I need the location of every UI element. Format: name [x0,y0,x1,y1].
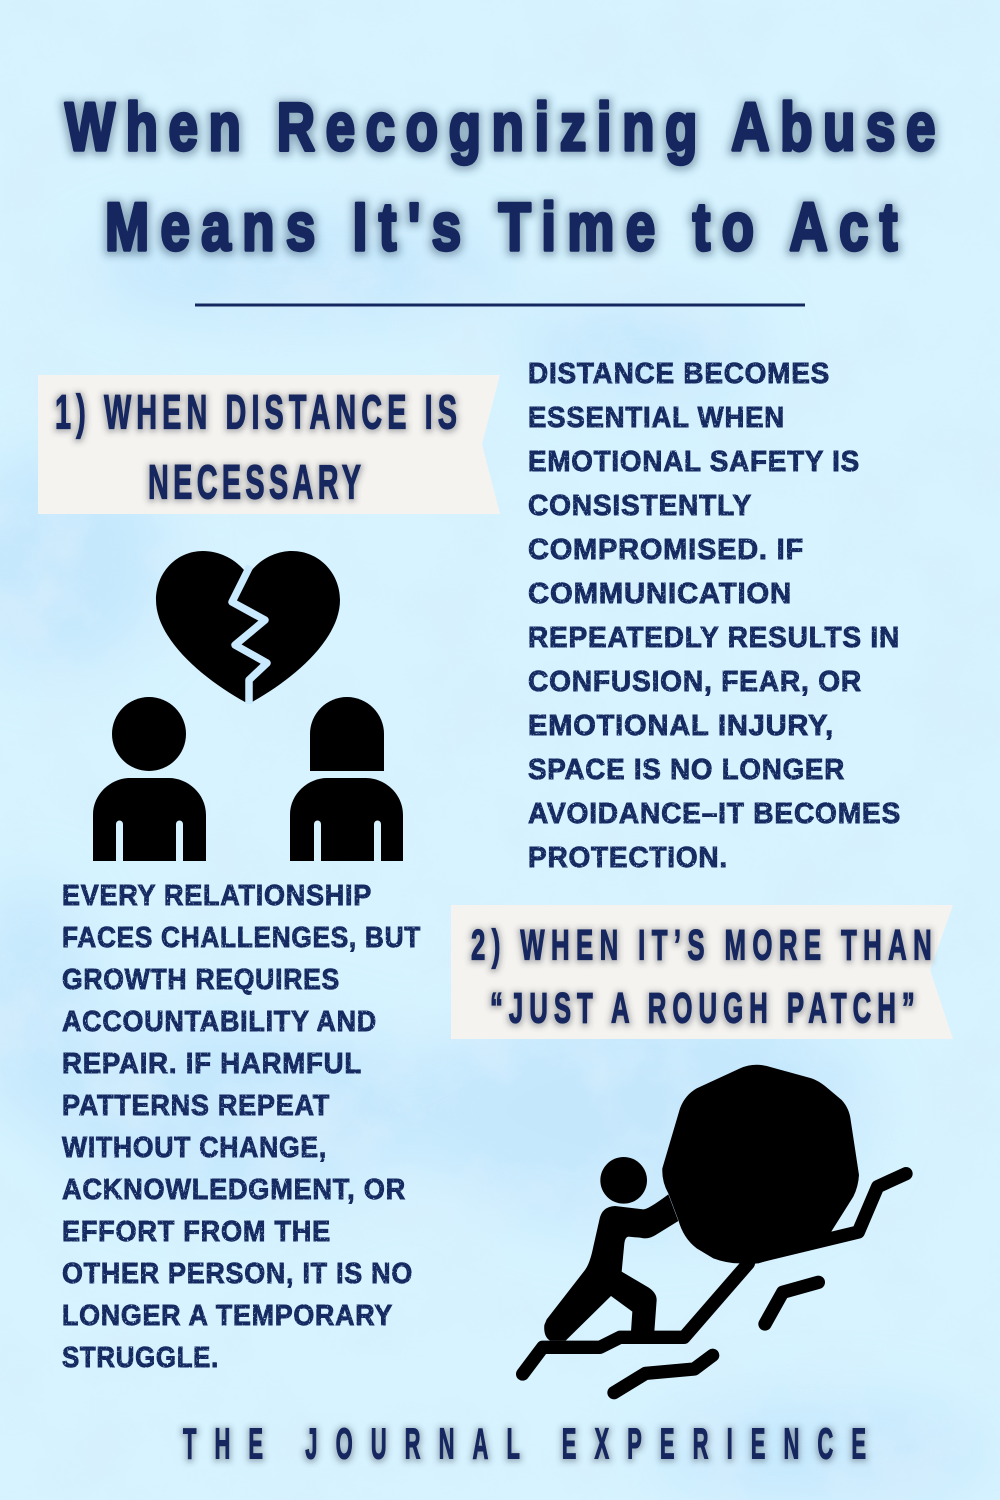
banner: when distance is necessary [38,375,500,514]
banner: when distance is necessary: 1) WHEN DISTANCE IS [55,386,457,439]
icon: woman figure [290,697,403,861]
banner: more than just a rough patch: “JUST A ROUGH PATCH” [490,984,915,1032]
body text: every relationship faces challenges: EVERY RELATIONSHIP [62,880,372,912]
body text: every relationship faces challenges: FACES CHALLENGES, BUT [62,922,421,954]
body text: every relationship faces challenges: WITHOUT CHANGE, [62,1132,327,1164]
body text: every relationship faces challenges: REPAIR. IF HARMFUL [62,1048,362,1080]
body text: distance becomes essential: PROTECTION. [528,842,728,874]
body text: every relationship faces challenges: LONGER A TEMPORARY [62,1300,393,1332]
body text: every relationship faces challenges: STRUGGLE. [62,1342,219,1374]
icon: man figure [93,697,206,861]
body text: distance becomes essential: CONSISTENTLY [528,490,752,522]
body text: every relationship faces challenges: OTHER PERSON, IT IS NO [62,1258,413,1290]
body text: distance becomes essential: COMPROMISED. IF [528,534,804,566]
title divider [195,304,805,306]
body text: every relationship faces challenges: ACCOUNTABILITY AND [62,1006,377,1038]
body text: distance becomes essential [528,358,901,874]
body text: distance becomes essential: REPEATEDLY RESULTS IN [528,622,900,654]
footer brand name: THE JOURNAL EXPERIENCE [183,1421,866,1469]
body text: distance becomes essential: DISTANCE BECOMES [528,358,830,390]
banner: more than just a rough patch: 2) WHEN IT’S MORE THAN [471,921,932,969]
banner: when distance is necessary: NECESSARY [148,456,361,509]
body text: distance becomes essential: SPACE IS NO LONGER [528,754,845,786]
title: Means It's Time to Act [105,189,897,264]
body text: every relationship faces challenges: EFFORT FROM THE [62,1216,331,1248]
body text: distance becomes essential: AVOIDANCE–IT BECOMES [528,798,901,830]
body text: every relationship faces challenges [62,880,421,1374]
icon: person pushing boulder uphill [523,1065,906,1393]
title: When Recognizing Abuse [65,89,935,164]
title [65,89,935,264]
body text: every relationship faces challenges: ACKNOWLEDGMENT, OR [62,1174,406,1206]
body text: distance becomes essential: ESSENTIAL WHEN [528,402,785,434]
body text: distance becomes essential: EMOTIONAL SAFETY IS [528,446,860,478]
icon: broken heart [156,551,340,704]
body text: distance becomes essential: COMMUNICATION [528,578,792,610]
body text: distance becomes essential: EMOTIONAL INJURY, [528,710,834,742]
body text: every relationship faces challenges: PATTERNS REPEAT [62,1090,330,1122]
banner: more than just a rough patch [451,905,953,1039]
body text: distance becomes essential: CONFUSION, FEAR, OR [528,666,862,698]
body text: every relationship faces challenges: GROWTH REQUIRES [62,964,340,996]
